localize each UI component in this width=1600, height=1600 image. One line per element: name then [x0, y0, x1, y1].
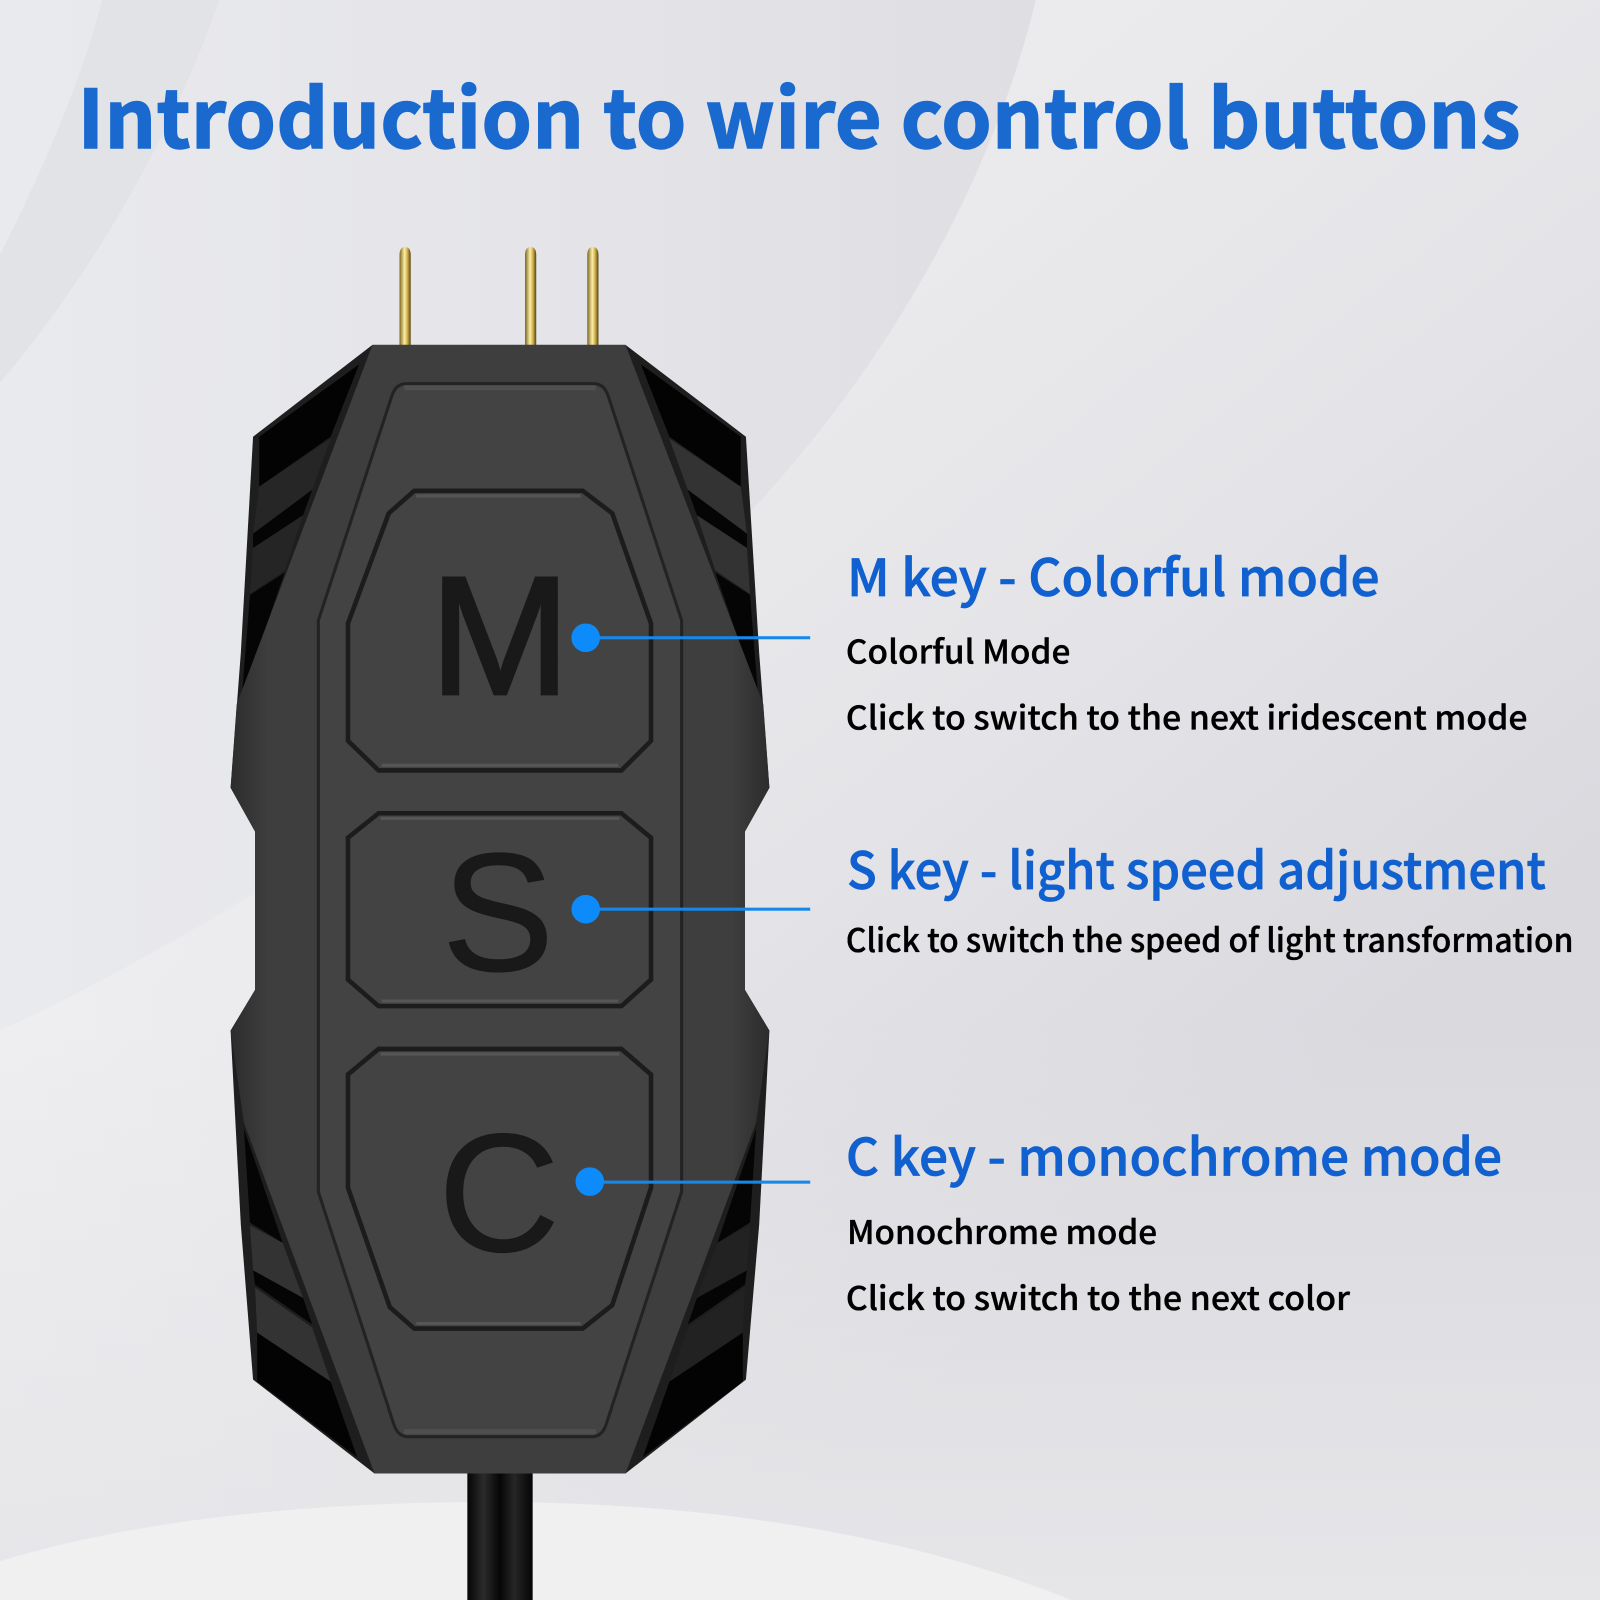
- callout: C key pointer: [576, 1167, 810, 1196]
- S button: [348, 813, 651, 1006]
- text block: S key: S key - light speed adjustment: [847, 830, 1546, 904]
- text block: S key: [846, 830, 1573, 962]
- recessed panel: [318, 384, 682, 1437]
- module outer shell: [231, 345, 769, 1473]
- cable: [467, 1469, 533, 1600]
- text block: M key: Colorful Mode: [846, 626, 1070, 673]
- S button: S: [442, 818, 554, 1006]
- callout: S key pointer: [571, 895, 810, 923]
- M button: M: [430, 542, 570, 730]
- C button: C: [438, 1099, 560, 1287]
- C button: [348, 1049, 651, 1329]
- text block: C key: [846, 1117, 1502, 1320]
- device: wire control module: [231, 247, 769, 1600]
- text block: S key: Click to switch the speed of light transformation: [846, 915, 1573, 962]
- M button: [348, 491, 651, 770]
- text block: M key: M key - Colorful mode: [847, 537, 1380, 611]
- text block: C key: C key - monochrome mode: [846, 1117, 1502, 1191]
- text block: M key: [846, 537, 1528, 740]
- title: Introduction to wire control buttons: [78, 55, 1520, 172]
- icon: gold pins: [399, 247, 598, 347]
- module centre body: [231, 345, 769, 1473]
- callout: M key pointer: [571, 623, 810, 652]
- side vents: [242, 364, 758, 1457]
- text block: C key: Click to switch to the next color: [846, 1273, 1351, 1320]
- text block: C key: Monochrome mode: [847, 1207, 1157, 1254]
- text block: M key: Click to switch to the next iridescent mode: [846, 693, 1528, 740]
- panel bevels: [404, 388, 596, 1432]
